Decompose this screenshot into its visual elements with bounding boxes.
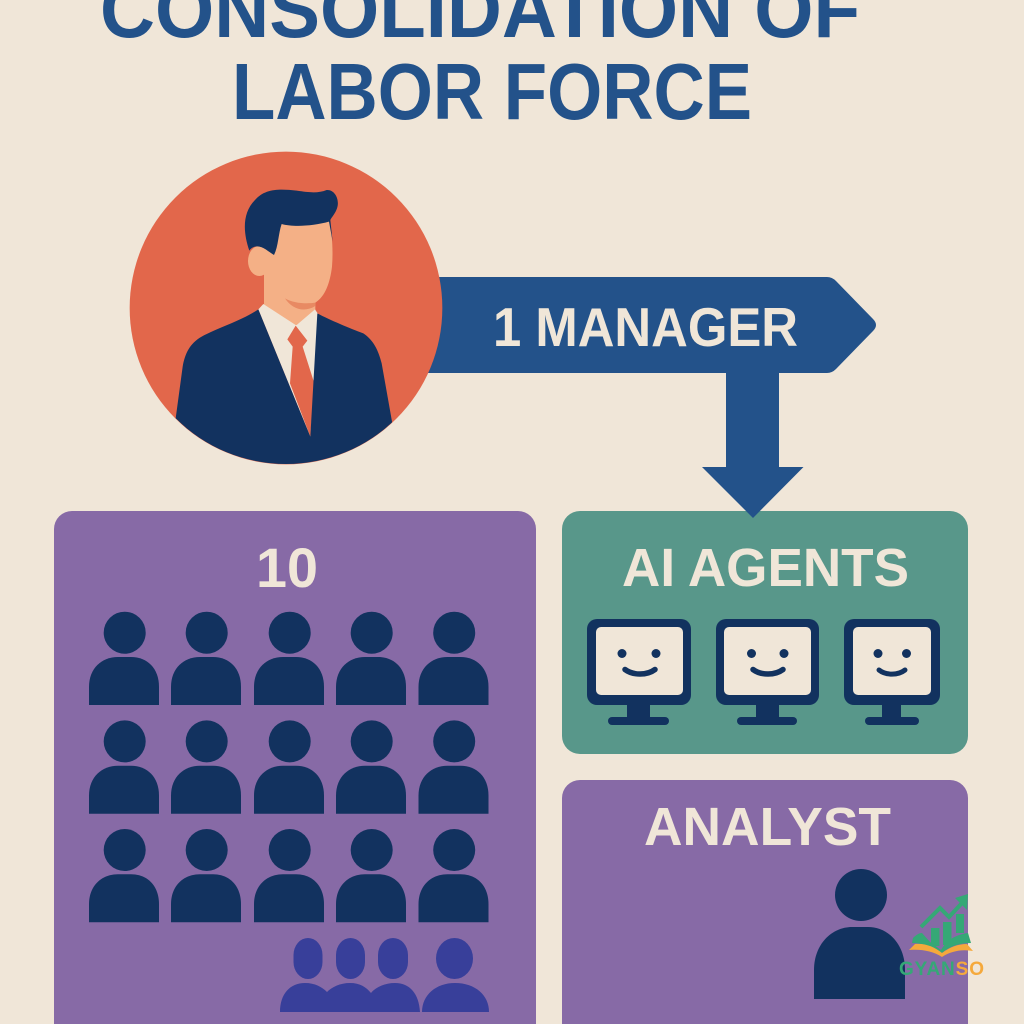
icon: Gyanso logo bbox=[899, 894, 984, 980]
logo wordmark: GYANSO bbox=[899, 959, 984, 980]
panel: AI agents bbox=[562, 511, 968, 754]
icon: smiling monitor 3 bbox=[844, 619, 940, 725]
icon: analyst person bbox=[814, 869, 905, 999]
panel heading: 10: 10 bbox=[256, 536, 318, 599]
hair bbox=[245, 190, 338, 255]
ear bbox=[248, 246, 265, 276]
arrow: manager label and down arrow bbox=[425, 277, 876, 518]
panel: analyst bbox=[562, 780, 968, 1024]
icon: manager portrait bbox=[130, 152, 442, 470]
faded people row bbox=[280, 938, 489, 1012]
title bbox=[100, 0, 860, 136]
title: LABOR FORCE bbox=[232, 47, 752, 136]
collar bbox=[258, 304, 318, 437]
suit bbox=[176, 309, 392, 464]
arrow label: 1 MANAGER bbox=[493, 296, 798, 358]
panel heading: AI agents: AI AGENTS bbox=[622, 538, 909, 598]
panel heading: analyst: ANALYST bbox=[644, 797, 891, 857]
icon: smiling monitor 1 bbox=[587, 619, 691, 725]
chin shadow bbox=[285, 298, 315, 309]
people grid bbox=[89, 612, 488, 922]
logo bars bbox=[931, 928, 940, 946]
face and neck bbox=[264, 218, 333, 327]
icon: smiling monitor 2 bbox=[716, 619, 819, 725]
tie bbox=[287, 326, 314, 437]
panel: 10 workers bbox=[54, 511, 536, 1024]
logo book bbox=[912, 933, 971, 953]
logo chart arrow bbox=[921, 903, 962, 927]
